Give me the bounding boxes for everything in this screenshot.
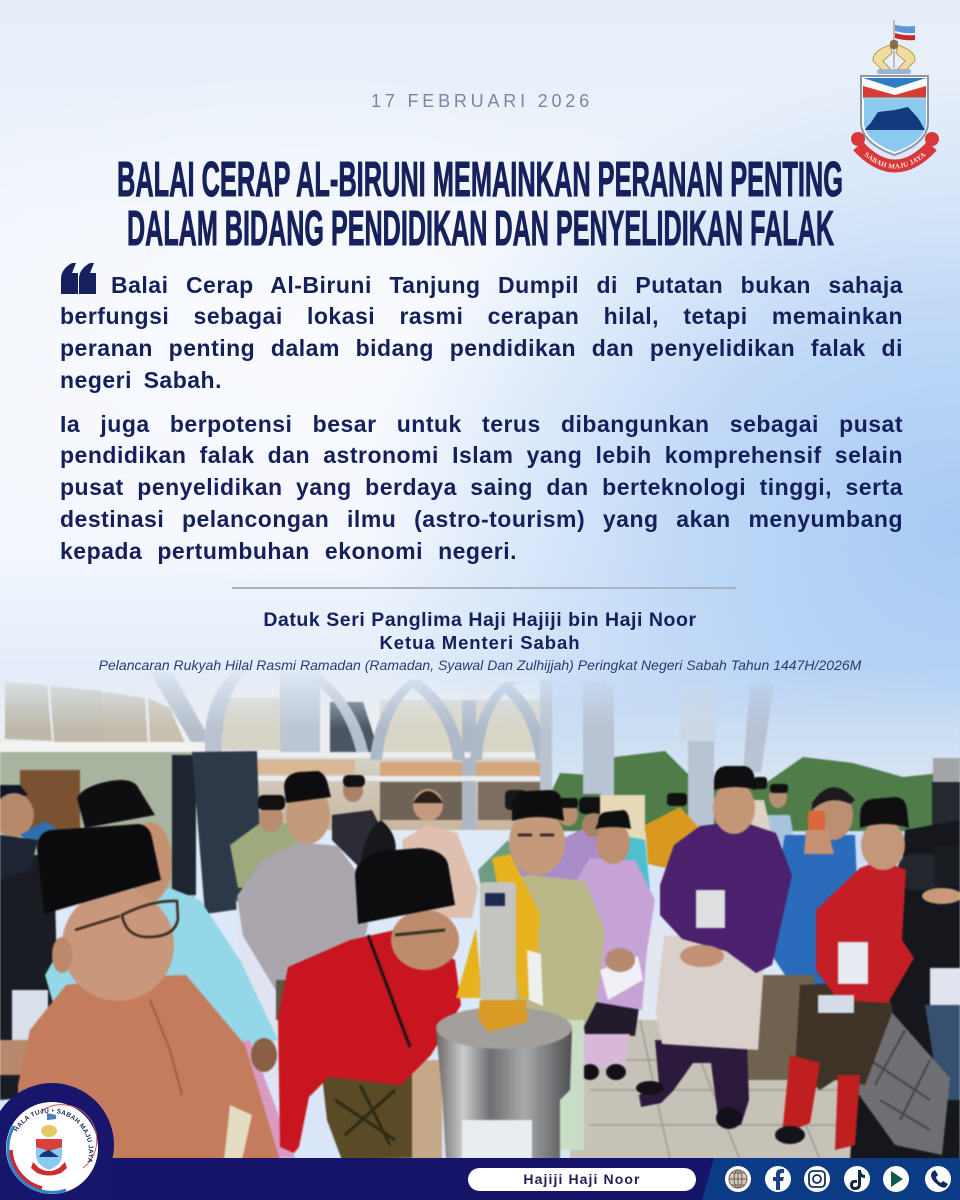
attribution — [99, 609, 862, 673]
icon: motto ribbon — [851, 132, 939, 172]
quote paragraph 2: destinasi pelancongan ilmu (astro-tourism) yang akan menyumbang — [60, 506, 903, 532]
emblem: Sabah coat of arms — [851, 20, 939, 172]
camera crew at right edge — [850, 758, 960, 1160]
icon: website — [725, 1166, 751, 1192]
attribution: Ketua Menteri Sabah — [379, 632, 581, 653]
main VIP in salmon baju — [18, 824, 280, 1160]
icon: flag — [893, 20, 915, 68]
guest in lilac — [570, 810, 655, 1080]
icon: tiktok — [844, 1166, 870, 1192]
quote paragraph 2: pusat penyelidikan yang berdaya saing dan berteknologi tinggi, serta — [60, 474, 903, 500]
guest in white behind — [235, 900, 240, 910]
icon: facebook — [765, 1166, 791, 1192]
icon: shield — [860, 75, 929, 156]
name pill — [468, 1168, 696, 1191]
icon: opening quotation mark — [61, 263, 96, 294]
floor tiles — [412, 925, 910, 1160]
quote paragraph 2 — [60, 411, 903, 564]
quote paragraph 2: pendidikan falak dan astronomi Islam yang lebih komprehensif selain — [60, 442, 903, 468]
title — [117, 153, 843, 255]
surveying instrument on steel stand — [436, 854, 572, 1160]
icon: motto ribbon: SABAH MAJU JAYA — [864, 152, 926, 169]
social icons — [725, 1166, 951, 1192]
round columns — [583, 682, 774, 831]
name pill: Hajiji Haji Noor — [523, 1171, 641, 1187]
quote paragraph 1 — [60, 272, 903, 393]
building with arched windows — [0, 660, 552, 914]
quote paragraph 1: Balai Cerap Al-Biruni Tanjung Dumpil di Putatan bukan sahaja — [111, 272, 903, 298]
photo: officials at the observatory — [0, 674, 960, 1158]
quote paragraph 1: berfungsi sebagai lokasi rasmi cerapan hilal, tetapi memainkan — [60, 303, 903, 329]
guest in grey baju — [237, 771, 368, 1020]
attribution: Pelancaran Rukyah Hilal Rasmi Ramadan (Ramadan, Syawal Dan Zulhijjah) Peringkat Negeri Sabah Tahun 1447H/2026M — [99, 657, 861, 673]
official in red baju bending over instrument — [278, 848, 461, 1160]
quote paragraph 1: negeri Sabah. — [60, 367, 222, 393]
date: 17 FEBRUARI 2026 — [371, 91, 593, 111]
guest in blue taking a photo — [742, 787, 860, 1080]
quote paragraph 2: Ia juga berpotensi besar untuk terus dibangunkan sebagai pusat — [60, 411, 903, 437]
attribution: Datuk Seri Panglima Haji Hajiji bin Haji Noor — [263, 609, 697, 631]
icon: instagram — [804, 1166, 830, 1192]
logo badge: Hala Tuju Sabah Maju Jaya — [0, 1083, 114, 1194]
icon: phone — [925, 1166, 951, 1192]
police officers at far left — [0, 785, 63, 1100]
quote paragraph 2: kepada pertumbuhan ekonomi negeri. — [60, 538, 517, 564]
guest in purple — [636, 766, 792, 1129]
icon: youtube play — [883, 1166, 909, 1192]
icon: crest hands — [873, 40, 915, 74]
quote paragraph 1: peranan penting dalam bidang pendidikan dan penyelidikan falak di — [60, 335, 903, 361]
background guests — [230, 775, 795, 918]
logo badge: Hala Tuju Sabah Maju Jaya: HALA TUJU • SABAH MAJU JAYA — [14, 1108, 94, 1162]
footer bar — [116, 1158, 960, 1200]
VIP in light green baju — [508, 789, 606, 1150]
sky and trees — [551, 698, 960, 832]
guest in cyan baju — [45, 780, 295, 1158]
guest in red with lanyard — [775, 797, 914, 1150]
